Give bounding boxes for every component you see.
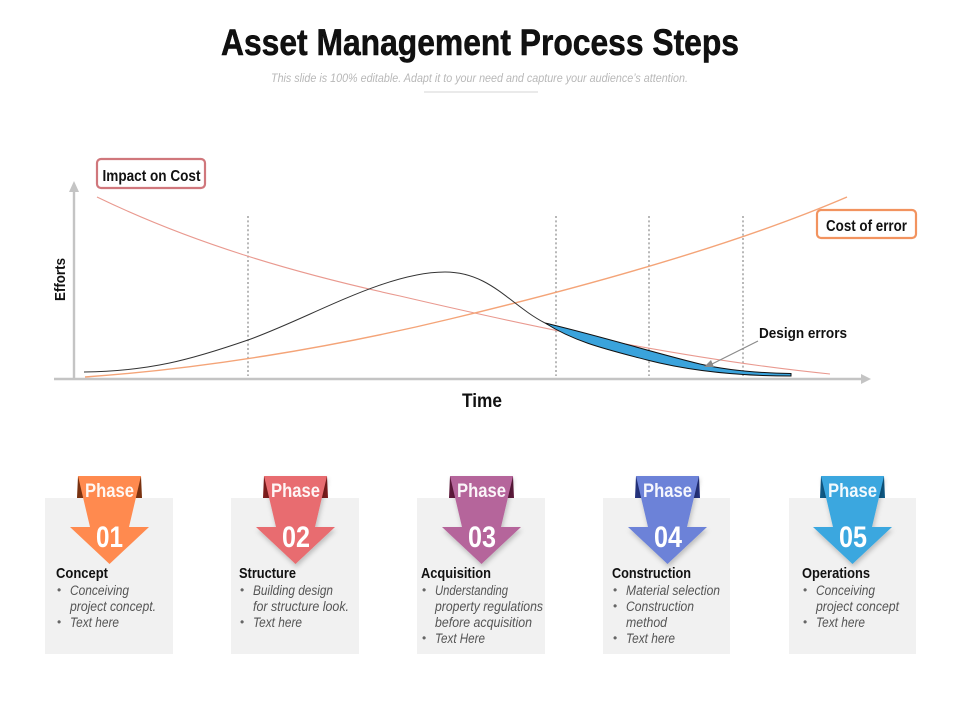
arrow: phase 05 bbox=[813, 476, 892, 564]
bullets: concept: • bbox=[57, 615, 61, 629]
panel: phase 03 acquisition bbox=[417, 476, 545, 654]
bullets: operations bbox=[803, 583, 900, 630]
chart: efforts over time bbox=[52, 159, 916, 412]
bullets: concept: Text here bbox=[70, 615, 119, 630]
bullets: concept: project concept. bbox=[69, 599, 156, 614]
bullets: acquisition: Text Here bbox=[435, 631, 485, 646]
arrow: phase 03 bbox=[442, 476, 521, 564]
bullets: structure: for structure look. bbox=[253, 599, 349, 614]
curve: impact on cost bbox=[97, 197, 830, 374]
bullets: acquisition: • bbox=[422, 631, 426, 645]
panel: phase 05 operations bbox=[789, 476, 916, 654]
bullets: structure bbox=[240, 583, 349, 630]
callout: cost of error bbox=[817, 210, 916, 238]
heading: construction: Construction bbox=[612, 565, 691, 582]
bullets: construction: Text here bbox=[626, 631, 675, 646]
bullets: acquisition: • bbox=[422, 583, 426, 597]
bullets: construction: • bbox=[613, 599, 617, 613]
arrow: phase 04: Phase bbox=[643, 481, 692, 502]
bullets: construction: • bbox=[613, 631, 617, 645]
callout: impact on cost: Impact on Cost bbox=[102, 168, 200, 185]
bullets: structure: Building design bbox=[253, 583, 333, 598]
arrow: phase 02: 02 bbox=[282, 521, 310, 554]
design errors pointer bbox=[704, 341, 758, 367]
bullets: operations: • bbox=[803, 583, 807, 597]
bullets: concept: Conceiving bbox=[70, 583, 129, 598]
curve: cost of error bbox=[85, 197, 847, 377]
x axis label: Time bbox=[462, 391, 502, 412]
area: design errors bbox=[545, 323, 791, 376]
bullets: concept: • bbox=[57, 583, 61, 597]
bullets: structure: • bbox=[240, 583, 244, 597]
heading: concept: Concept bbox=[56, 565, 108, 582]
callout: cost of error: Cost of error bbox=[826, 218, 907, 235]
bullets: operations: Conceiving bbox=[816, 583, 875, 598]
bullets: structure: • bbox=[240, 615, 244, 629]
bullets: concept bbox=[57, 583, 156, 630]
arrow: phase 04 bbox=[628, 476, 707, 564]
subtitle: This slide is 100% editable. Adapt it to your need and capture your audience’s attention. bbox=[271, 73, 688, 85]
callout: impact on cost bbox=[97, 159, 205, 188]
bullets: construction: method bbox=[626, 615, 667, 630]
curve: efforts bbox=[84, 272, 545, 372]
bullets: operations: Text here bbox=[816, 615, 865, 630]
bullets: construction: • bbox=[613, 583, 617, 597]
arrow: phase 02 bbox=[256, 476, 335, 564]
panel: phase 01 concept bbox=[45, 476, 173, 654]
x axis bbox=[54, 374, 871, 384]
heading: structure: Structure bbox=[239, 565, 296, 582]
arrow: phase 05: 05 bbox=[839, 521, 867, 554]
heading: acquisition: Acquisition bbox=[421, 565, 491, 582]
label: design errors: Design errors bbox=[759, 325, 847, 342]
bullets: operations: project concept bbox=[815, 599, 900, 614]
arrow: phase 02: Phase bbox=[271, 481, 320, 502]
bullets: construction: Construction bbox=[626, 599, 694, 614]
arrow: phase 01: Phase bbox=[85, 481, 134, 502]
bullets: operations: • bbox=[803, 615, 807, 629]
arrow: phase 03: 03 bbox=[468, 521, 496, 554]
bullets: construction: Material selection bbox=[626, 583, 720, 598]
bullets: structure: Text here bbox=[253, 615, 302, 630]
bullets: construction bbox=[613, 583, 720, 646]
arrow: phase 03: Phase bbox=[457, 481, 506, 502]
y axis bbox=[69, 181, 79, 379]
y axis label: Efforts bbox=[52, 258, 69, 301]
panel: phase 02 structure bbox=[231, 476, 359, 654]
bullets: acquisition: Understanding bbox=[435, 583, 508, 598]
bullets: acquisition bbox=[422, 583, 543, 646]
heading: operations: Operations bbox=[802, 565, 870, 582]
title: Asset Management Process Steps bbox=[221, 22, 739, 63]
panel: phase 04 construction bbox=[603, 476, 730, 654]
arrow: phase 04: 04 bbox=[654, 521, 682, 554]
arrow: phase 01 bbox=[70, 476, 149, 564]
arrow: phase 05: Phase bbox=[828, 481, 877, 502]
bullets: acquisition: property regulations bbox=[434, 599, 543, 614]
bullets: acquisition: before acquisition bbox=[435, 615, 532, 630]
arrow: phase 01: 01 bbox=[96, 521, 123, 554]
